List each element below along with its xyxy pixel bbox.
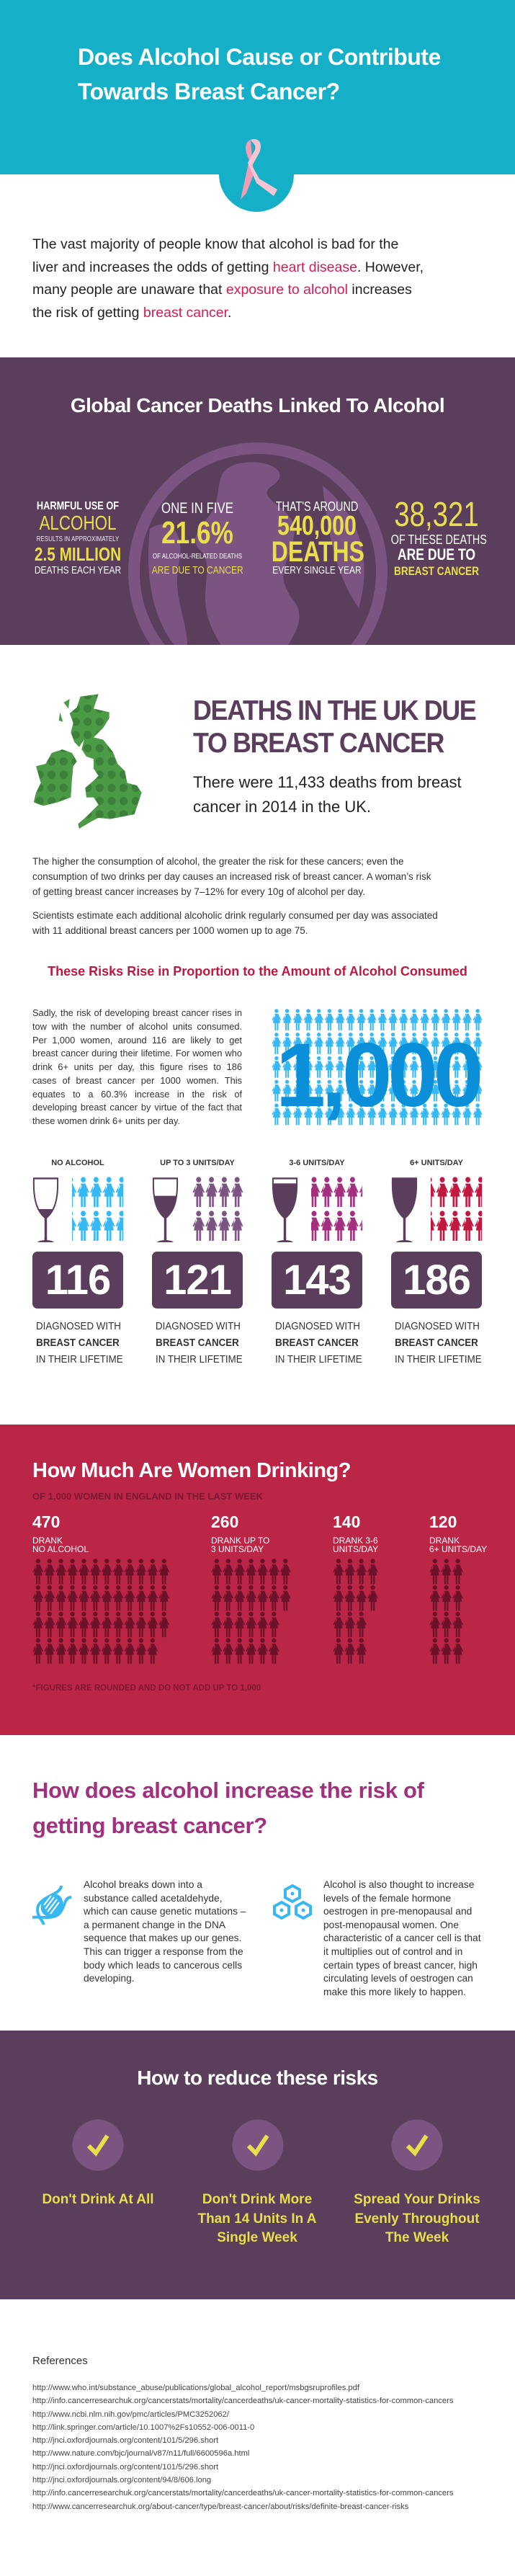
heading: How Much Are Women Drinking? — [32, 1459, 351, 1482]
icon: pink ribbon badge — [219, 139, 294, 212]
text: acetaldehyde: body which leads to cancerous cells — [84, 1960, 242, 1971]
stat: harmful use of alcohol: ALCOHOL — [39, 512, 117, 534]
text: BREAST CANCER — [156, 1337, 239, 1349]
UK statistic text — [193, 773, 462, 816]
chart: 1,000 women icon grid: 1,000 — [276, 1025, 480, 1126]
stat: harmful use of alcohol — [35, 500, 121, 576]
heading: deaths in the UK: TO BREAST CANCER — [193, 728, 444, 759]
icon: hexagon cells — [273, 1884, 312, 1920]
stat: 540,000 deaths: DEATHS — [272, 536, 364, 568]
references list: http://jnci.oxfordjournals.org/content/101/5/296.short — [32, 2463, 218, 2472]
group: 140 — [333, 1512, 378, 1554]
panel: global cancer deaths — [0, 357, 515, 645]
text: acetaldehyde: a permanent change in the DNA — [84, 1920, 225, 1930]
stat: harmful use of alcohol: 2.5 MILLION — [35, 543, 121, 565]
stat: one in five: 21.6% — [161, 515, 233, 551]
UK statistic text: cancer in 2014 in the UK. — [193, 798, 371, 816]
text: 143 — [283, 1257, 351, 1303]
text: oestrogen — [323, 1879, 481, 1997]
group: 260: 260 — [211, 1512, 238, 1531]
icon: checkmarks — [72, 2120, 442, 2170]
stat: harmful use of alcohol: DEATHS EACH YEAR — [35, 564, 121, 576]
subheading: OF 1,000 WOMEN IN ENGLAND IN THE LAST WEEK — [32, 1491, 263, 1502]
stat: 38,321 breast cancer — [391, 496, 487, 578]
text: acetaldehyde — [84, 1879, 246, 1984]
group: 120: 6+ UNITS/DAY — [429, 1544, 487, 1554]
references list: http://info.cancerresearchuk.org/cancerstats/mortality/cancerdeaths/uk-cancer-mortality-statistics-for-common-cancers — [32, 2489, 453, 2497]
title — [78, 44, 441, 104]
paragraph: consumption risk: consumption of two drinks per day causes an increased risk of breast cancer. A woman’s risk — [32, 871, 431, 882]
references list: http://jnci.oxfordjournals.org/content/94/8/606.long — [32, 2476, 211, 2484]
group: 470 no alcohol — [32, 1512, 89, 1554]
chart: women pictogram — [33, 1559, 464, 1664]
text: IN THEIR LIFETIME — [275, 1354, 362, 1365]
stat: one in five: OF ALCOHOL-RELATED DEATHS — [153, 553, 242, 561]
text: 6+ UNITS/DAY — [410, 1159, 463, 1167]
text: IN THEIR LIFETIME — [156, 1354, 243, 1365]
stat: 38,321 breast cancer: ARE DUE TO — [398, 545, 475, 563]
text: DIAGNOSED WITH — [395, 1321, 480, 1332]
stat: one in five: ARE DUE TO CANCER — [152, 564, 243, 576]
tip 3: Spread Your Drinks Evenly Throughout The Week — [354, 2192, 480, 2245]
stat: 38,321 breast cancer: 38,321 — [394, 496, 479, 534]
text: acetaldehyde: This can trigger a response from the — [84, 1946, 243, 1957]
stat: one in five: ONE IN FIVE — [161, 500, 233, 517]
text: acetaldehyde: which can cause genetic mutations – — [84, 1906, 246, 1917]
references list: http://www.who.int/substance_abuse/publications/global_alcohol_report/msbgsruprofiles.pdf — [32, 2384, 359, 2392]
text: acetaldehyde: Alcohol breaks down into a — [84, 1879, 202, 1890]
references list: http://www.cancerresearchuk.org/about-cancer/type/breast-cancer/about/risks/definite-breast-cancer-risks — [32, 2503, 408, 2511]
paragraph: consumption risk: The higher the consumption of alcohol, the greater the risk for these cancers; even the — [32, 856, 404, 867]
paragraph: per 1000 women: Sadly, the risk of developing breast cancer rises in tow with the number of alcohol units consumed. Per 1,000 women, around 116 are likely to get breast cancer during their lifetime. For women who drink 6+ units per day, this figure rises to 186 cases of breast cancer per 1000 women. This equates to a 60.3% increase in the risk of developing breast cancer by virtue of the fact that these women drink 6+ units per day. — [32, 1007, 242, 1126]
heading: Global Cancer Deaths Linked To Alcohol — [71, 394, 444, 416]
text: acetaldehyde: sequence that makes up our genes. — [84, 1933, 241, 1943]
stat: 540,000 deaths: 540,000 — [277, 511, 357, 541]
text: 3-6 UNITS/DAY — [289, 1159, 345, 1167]
stat: 38,321 breast cancer: BREAST CANCER — [394, 564, 479, 578]
diagnosed captions: IN THEIR LIFETIME — [36, 1354, 123, 1365]
icons: glasses and women rows — [33, 1177, 483, 1242]
paragraph: scientists estimate — [32, 910, 438, 936]
paragraph: scientists estimate: with 11 additional breast cancers per 1000 women up to age 75. — [32, 925, 308, 936]
icon: UK map — [33, 694, 142, 829]
text: 121 — [164, 1257, 231, 1303]
number boxes — [32, 1252, 123, 1309]
text: BREAST CANCER — [275, 1337, 359, 1349]
title: Towards Breast Cancer? — [78, 79, 340, 104]
intro paragraph: the risk of getting breast cancer. — [32, 305, 231, 321]
text: oestrogen: it multiplies out of control and in — [323, 1946, 462, 1957]
stat: 540,000 deaths — [272, 499, 364, 576]
stat: harmful use of alcohol: HARMFUL USE OF — [37, 500, 119, 512]
title: Does Alcohol Cause or Contribute — [78, 44, 441, 70]
panel: how much are women drinking — [0, 1425, 515, 1735]
references heading: References — [32, 2355, 88, 2367]
references list: http://www.nature.com/bjc/journal/v87/n11/full/6600596a.html — [32, 2449, 249, 2458]
group: 120 — [429, 1512, 487, 1554]
number boxes: 116 — [45, 1257, 110, 1303]
tip 2: Don't Drink More Than 14 Units In A Single Week — [197, 2192, 317, 2245]
intro paragraph: The vast majority of people know that alcohol is bad for the — [32, 236, 398, 252]
heading: how does alcohol increase risk: How does alcohol increase the risk of — [32, 1778, 424, 1803]
references list: http://www.ncbi.nlm.nih.gov/pmc/articles/PMC3252062/ — [32, 2410, 229, 2419]
icon: DNA — [32, 1886, 71, 1925]
heading: deaths in the UK: DEATHS IN THE UK DUE — [193, 695, 475, 726]
diagnosed captions — [36, 1321, 123, 1365]
group: 470 no alcohol: NO ALCOHOL — [32, 1544, 89, 1554]
header banner — [0, 0, 515, 174]
heading: How to reduce these risks — [137, 2067, 378, 2089]
paragraph: scientists estimate: Scientists estimate each additional alcoholic drink regularly consumed per day was associated — [32, 910, 438, 921]
stat: 540,000 deaths: THAT'S AROUND — [276, 499, 358, 514]
group: 260: DRANK UP TO — [211, 1536, 269, 1546]
text: oestrogen: circulating levels of oestrogen can — [323, 1973, 473, 1984]
group: 470 no alcohol: DRANK — [32, 1536, 63, 1546]
group: 120: DRANK — [429, 1536, 460, 1546]
icon: globe — [128, 442, 388, 645]
group: 260 — [211, 1512, 269, 1554]
text: IN THEIR LIFETIME — [395, 1354, 482, 1365]
footnote: *FIGURES ARE ROUNDED AND DO NOT ADD UP TO 1,000 — [32, 1684, 261, 1693]
references list: http://jnci.oxfordjournals.org/content/101/5/296.short — [32, 2436, 218, 2445]
group: 260: 3 UNITS/DAY — [211, 1544, 264, 1554]
panel: how to reduce these risks — [0, 2031, 515, 2299]
column labels: NO ALCOHOL — [51, 1159, 104, 1167]
paragraph: consumption risk — [32, 856, 431, 897]
diagnosed captions: DIAGNOSED WITH — [36, 1321, 121, 1332]
heading: deaths in the UK — [193, 695, 475, 759]
text: oestrogen: certain types of breast cancer, high — [323, 1960, 478, 1971]
heading: how does alcohol increase risk: getting breast cancer? — [32, 1813, 267, 1838]
group: 140: UNITS/DAY — [333, 1544, 378, 1554]
tip 1: Don't Drink At All — [42, 2192, 154, 2207]
diagnosed captions: BREAST CANCER — [36, 1337, 120, 1349]
heading: risks rise: These Risks Rise in Proportion to the Amount of Alcohol Consumed — [48, 964, 467, 979]
stat: 540,000 deaths: EVERY SINGLE YEAR — [272, 564, 362, 576]
group: 140: 140 — [333, 1512, 360, 1531]
text: acetaldehyde: developing. — [84, 1973, 135, 1984]
stat: harmful use of alcohol: RESULTS IN APPROXIMATELY — [37, 535, 119, 543]
text: oestrogen: oestrogen in pre-menopausal and — [323, 1906, 472, 1917]
intro paragraph: many people are unaware that exposure to alcohol increases — [32, 282, 412, 298]
paragraph: consumption risk: of getting breast cancer increases by 7–12% for every 10g of alcohol per day. — [32, 886, 365, 897]
group: 140: DRANK 3-6 — [333, 1536, 378, 1546]
text: oestrogen: characteristic of a cancer cell is that — [323, 1933, 481, 1943]
text: DIAGNOSED WITH — [275, 1321, 360, 1332]
intro paragraph — [32, 236, 424, 321]
UK statistic text: There were 11,433 deaths from breast — [193, 773, 462, 791]
group: 120: 120 — [429, 1512, 457, 1531]
text: oestrogen: post-menopausal women. One — [323, 1920, 459, 1930]
references list — [32, 2384, 454, 2511]
group: 470 no alcohol: 470 — [32, 1512, 60, 1531]
references list: http://info.cancerresearchuk.org/cancerstats/mortality/cancerdeaths/uk-cancer-mortality-statistics-for-common-cancers — [32, 2397, 453, 2405]
text: oestrogen: Alcohol is also thought to increase — [323, 1879, 474, 1890]
stat: 38,321 breast cancer: OF THESE DEATHS — [391, 532, 487, 547]
text: oestrogen: make this more likely to happen. — [323, 1987, 466, 1997]
text: acetaldehyde: substance called acetaldehyde, — [84, 1893, 223, 1904]
text: 186 — [403, 1257, 470, 1303]
stat: one in five — [151, 500, 243, 576]
references list: http://link.springer.com/article/10.1007%2Fs10552-006-0011-0 — [32, 2423, 254, 2432]
text: BREAST CANCER — [395, 1337, 478, 1349]
heading: how does alcohol increase risk — [32, 1778, 424, 1838]
intro paragraph: liver and increases the odds of getting heart disease. However, — [32, 259, 424, 275]
text: DIAGNOSED WITH — [156, 1321, 241, 1332]
text: UP TO 3 UNITS/DAY — [160, 1159, 235, 1167]
text: oestrogen: levels of the female hormone — [323, 1893, 451, 1904]
